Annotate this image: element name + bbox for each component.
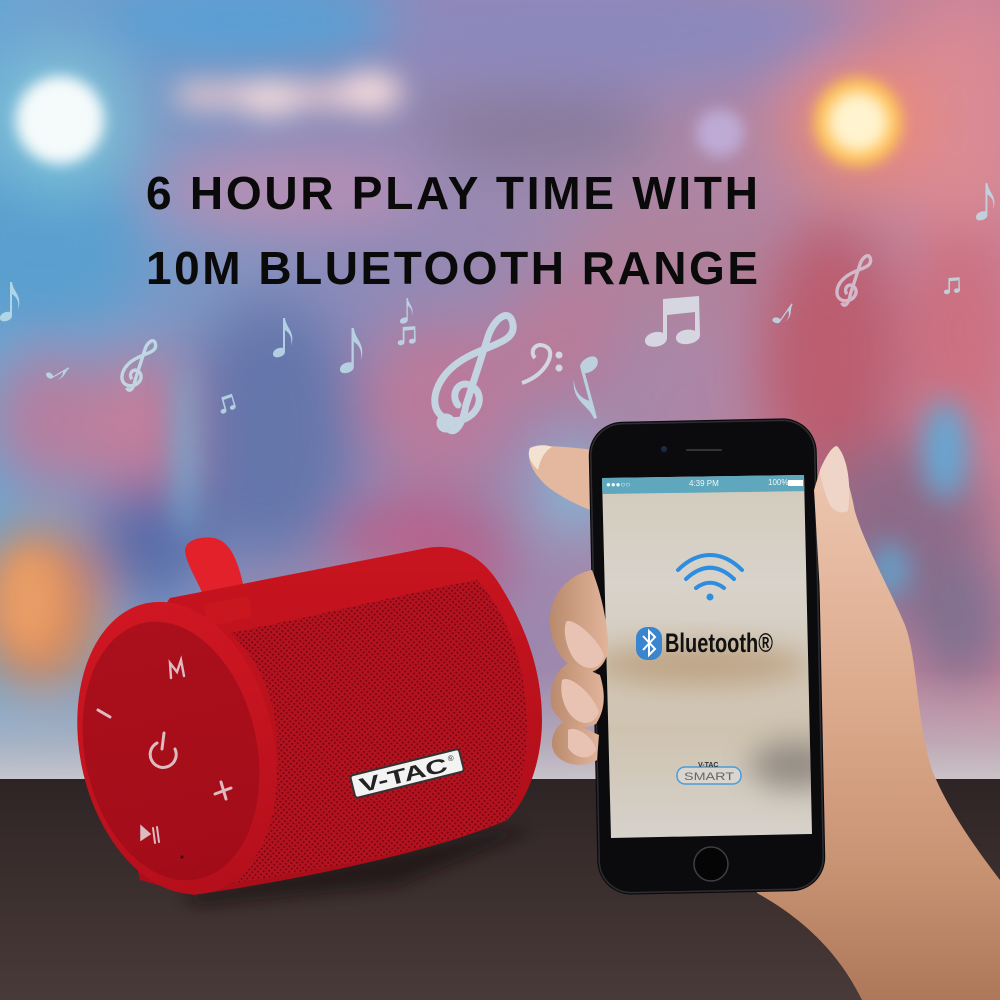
home button [694, 847, 728, 881]
icon: bass clef [522, 345, 562, 383]
icon: double note [645, 296, 700, 347]
speaker strap [185, 538, 244, 598]
icon: bluetooth [636, 627, 662, 660]
icon: wifi [678, 555, 742, 600]
speaker logo badge [350, 749, 464, 799]
thumb [814, 446, 890, 655]
index finger top [529, 446, 595, 512]
music notes [0, 183, 994, 431]
title: 6 HOUR PLAY TIME WITH [146, 167, 758, 219]
small treble clefs [122, 341, 156, 390]
phone [588, 418, 840, 895]
speaker face [51, 583, 303, 913]
status bar: 4:39 PM [689, 479, 719, 488]
v-tac smart logo [677, 762, 741, 784]
fingers over phone [550, 570, 608, 765]
title: 10M BLUETOOTH RANGE [146, 242, 758, 294]
v-tac smart logo: V-TAC [698, 762, 718, 769]
v-tac smart logo: SMART [684, 771, 734, 783]
speaker controls [98, 660, 231, 843]
speaker logo badge: ® [447, 753, 455, 764]
icon: large treble clef [435, 316, 513, 431]
finger 3 [552, 720, 599, 765]
status bar [606, 478, 803, 489]
hand behind the phone [529, 445, 1000, 1000]
table surface [0, 779, 1000, 1000]
icon: eighth note [567, 355, 612, 422]
status bar: ●●●○○ [606, 480, 630, 489]
phone screen [602, 475, 812, 838]
finger 2 [551, 662, 604, 727]
speaker body [100, 547, 542, 895]
speaker logo badge: V-TAC [357, 754, 450, 797]
speaker shadow [180, 830, 530, 905]
finger 1 [550, 570, 608, 672]
blurred concert background [0, 0, 1000, 790]
title [146, 167, 758, 294]
bluetooth wordmark: Bluetooth® [665, 628, 773, 658]
small notes [0, 282, 19, 321]
wrist and palm [757, 500, 1000, 1000]
status bar: 100% [768, 478, 788, 487]
speaker [51, 538, 542, 913]
